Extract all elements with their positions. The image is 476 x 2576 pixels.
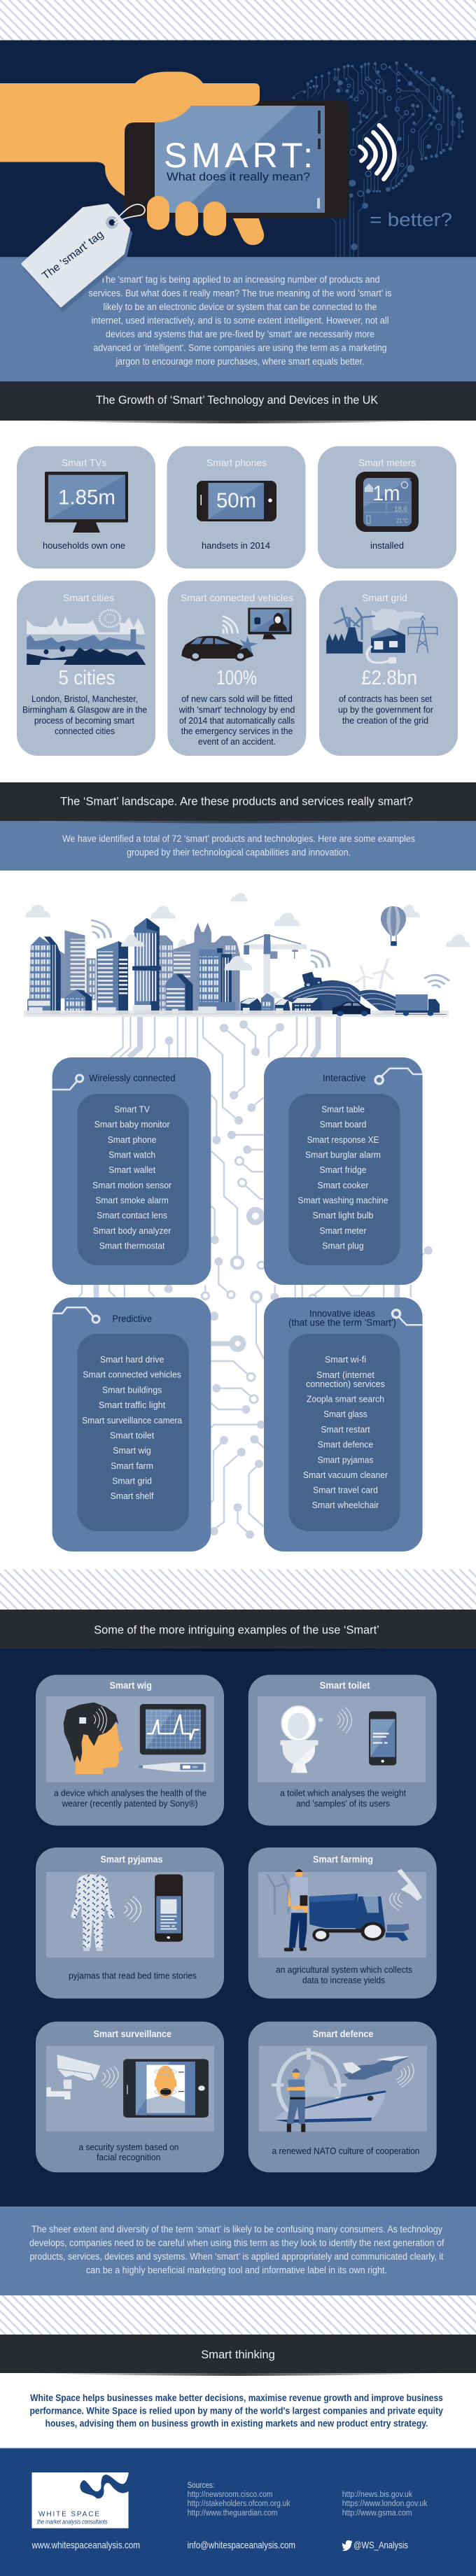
card: smart cities: 5 cities <box>59 667 115 689</box>
card: smart grid <box>319 581 458 756</box>
text: grid detail <box>338 694 434 726</box>
list: predictive: Smart hard drive <box>100 1354 164 1365</box>
intro band <box>0 257 476 381</box>
description <box>54 1789 206 1808</box>
card: smart phones <box>167 446 305 568</box>
footer <box>0 2448 476 2576</box>
description: a toilet which analyses the weight <box>280 1789 407 1799</box>
list: innovative ideas: Zoopla smart search <box>307 1394 384 1404</box>
panel: predictive <box>52 1297 211 1551</box>
text: cities detail <box>22 694 147 736</box>
logo: the market analysis consultants <box>37 2518 108 2525</box>
intro text: devices and systems that are pre-fixed by 'smart' are necessarily more <box>106 329 374 339</box>
balloon <box>381 906 406 946</box>
wifi signal icon <box>360 125 394 179</box>
circuit brain <box>292 62 464 257</box>
truck <box>395 994 447 1016</box>
icon: skyline <box>27 610 146 665</box>
list: interactive <box>288 1094 400 1265</box>
fingers <box>147 196 226 236</box>
card: smart TVs: households own one <box>43 540 125 551</box>
list: predictive: Smart connected vehicles <box>83 1369 181 1380</box>
city illustration <box>24 893 470 1017</box>
phone screen <box>155 106 325 213</box>
small house block <box>64 990 92 1014</box>
sources: Sources: <box>188 2482 215 2490</box>
email: info@whitespaceanalysis.com <box>188 2539 295 2550</box>
panel: predictive: Predictive <box>112 1313 152 1324</box>
icon: meter: 1m <box>372 481 400 505</box>
description: pyjamas that read bed time stories <box>69 1971 197 1980</box>
examples navy panel <box>0 1649 476 2207</box>
text: cities detail: London, Bristol, Manchester, <box>31 694 138 704</box>
card: smart wig <box>36 1675 224 1826</box>
list: wirelessly connected: Smart wallet <box>108 1164 155 1175</box>
icon: meter <box>356 472 419 532</box>
front low building <box>165 974 192 1014</box>
panel: wirelessly connected: Wirelessly connected <box>89 1072 176 1083</box>
card: smart grid: Smart grid <box>362 592 407 603</box>
panel: innovative ideas: Innovative ideas <box>309 1307 375 1318</box>
icon: phone: 50m <box>216 489 256 512</box>
text: vehicles detail: with 'smart' technology by end <box>178 704 295 715</box>
circuit accent <box>52 1307 99 1323</box>
card: smart phones: handsets in 2014 <box>202 540 270 551</box>
text: vehicles detail: the emergency services in the <box>181 726 293 736</box>
card: smart connected vehicles: Smart connected vehicles <box>181 592 293 603</box>
ground <box>24 1011 449 1017</box>
card: smart defence: Smart defence <box>313 2028 374 2039</box>
landscape intro band: grouped by their technological capabilities and innovation. <box>127 847 351 858</box>
list: wirelessly connected: Smart TV <box>114 1104 150 1114</box>
sources: https://www.london.gov.uk <box>342 2500 428 2508</box>
conclusion band: can be a highly beneficial marketing tool and informative label in its own right. <box>86 2265 387 2276</box>
car <box>332 1002 370 1016</box>
top stripes <box>0 0 476 41</box>
right building <box>198 948 235 1014</box>
icon: meter: 18.6 <box>394 505 407 514</box>
description: a device which analyses the health of the <box>54 1789 206 1799</box>
icon: TV: 1.85m <box>58 486 115 509</box>
intro text: services. But what does it really mean? The true meaning of the word 'smart' is <box>88 288 392 298</box>
list: innovative ideas: Smart wi-fi <box>325 1354 366 1365</box>
text: vehicles detail: of 2014 that automatically calls <box>179 715 295 726</box>
circuit accent <box>52 1075 83 1090</box>
list: innovative ideas: Smart wheelchair <box>312 1500 379 1510</box>
icon: meter: 21°C <box>396 517 408 524</box>
central tower <box>132 918 161 1014</box>
description: an agricultural system which collects <box>276 1965 412 1975</box>
icon: toilet and phone <box>280 1706 396 1773</box>
card: smart surveillance: Smart surveillance <box>94 2028 172 2039</box>
card: smart cities <box>17 581 155 756</box>
rear buildings <box>57 922 240 1013</box>
conclusion band <box>0 2207 476 2295</box>
text: grid detail: of contracts has been set <box>339 694 432 704</box>
circuit nodes <box>164 1020 433 1539</box>
list: predictive: Smart traffic light <box>99 1400 166 1410</box>
text: cities detail: process of becoming smart <box>34 715 134 726</box>
title: SMART: <box>164 136 313 175</box>
list: interactive: Smart plug <box>322 1240 364 1251</box>
card: smart toilet: Smart toilet <box>320 1680 370 1691</box>
list: interactive: Smart washing machine <box>298 1195 388 1205</box>
section heading: landscape: The ‘Smart’ landscape. Are these products and services really smart? <box>60 795 413 808</box>
card: smart defence <box>248 2022 437 2172</box>
icon: energy grid <box>326 607 438 663</box>
tractor <box>302 972 323 988</box>
list: interactive: Smart response XE <box>307 1134 379 1145</box>
description <box>280 1789 407 1808</box>
text: grid detail: the creation of the grid <box>342 715 428 726</box>
card: smart wig: Smart wig <box>109 1680 152 1691</box>
description: a renewed NATO culture of cooperation <box>272 2146 420 2156</box>
description: wearer (recently patented by Sony®) <box>62 1799 198 1808</box>
card: smart grid: £2.8bn <box>361 667 417 689</box>
twitter handle: @WS_Analysis <box>354 2539 408 2550</box>
company statement: houses, advising them on business growth in existing markets and new product entry strategy. <box>46 2418 428 2429</box>
hand <box>0 71 260 196</box>
icon: farmer, harvester and satellite <box>267 1869 422 1951</box>
logo <box>32 2472 129 2528</box>
card: smart TVs: Smart TVs <box>62 457 106 468</box>
hero panel <box>0 41 476 258</box>
section heading: examples: Some of the more intriguing examples of the use ‘Smart’ <box>94 1624 379 1636</box>
list: predictive: Smart farm <box>111 1461 153 1471</box>
list: wirelessly connected: Smart contact lens <box>97 1210 167 1220</box>
list: wirelessly connected <box>78 1094 189 1265</box>
icon: camera and tablet <box>46 2055 209 2118</box>
houses <box>240 992 323 1014</box>
sources: http://www.theguardian.com <box>188 2509 277 2517</box>
circuit rings <box>202 1157 316 1403</box>
list: wirelessly connected: Smart motion sensor <box>92 1180 172 1190</box>
list: interactive: Smart light bulb <box>312 1210 374 1220</box>
description <box>79 2143 178 2162</box>
tower left <box>27 936 61 1014</box>
circuit accent <box>392 1310 422 1325</box>
sources: http://news.bis.gov.uk <box>342 2491 412 2499</box>
list: innovative ideas <box>288 1334 400 1531</box>
cloud over towers <box>121 934 252 971</box>
card: smart cities: Smart cities <box>63 592 114 603</box>
card: smart toilet <box>248 1675 437 1826</box>
list: predictive: Smart grid <box>112 1475 152 1486</box>
icon: car and emergency call <box>181 608 291 661</box>
section heading: landscape <box>0 782 476 821</box>
list: predictive: Smart shelf <box>111 1491 154 1501</box>
conclusion band: develops, companies need to be careful when using this term as they look to identify the next generation of <box>29 2238 444 2248</box>
text: vehicles detail: event of an accident. <box>198 736 276 747</box>
card: smart farming: Smart farming <box>313 1853 373 1864</box>
intro text: advanced or 'intelligent'. Some companies are using the term as a marketing <box>94 343 386 353</box>
icon: soldier, ship and jet <box>272 2048 414 2132</box>
list: interactive: Smart meter <box>319 1225 367 1236</box>
card: smart meters: installed <box>370 540 404 551</box>
list: interactive: Smart fridge <box>319 1164 367 1175</box>
section heading: growth: The Growth of ‘Smart’ Technology and Devices in the UK <box>96 394 378 407</box>
list: innovative ideas: Smart (internet <box>316 1370 374 1380</box>
list: wirelessly connected: Smart phone <box>108 1134 157 1145</box>
intro text: internet, used interactively, and is to some extent intelligent. However, not all <box>91 315 389 326</box>
card: smart meters <box>318 446 456 568</box>
description <box>276 1965 412 1985</box>
card: smart TVs <box>17 446 155 568</box>
section heading: smart thinking: Smart thinking <box>201 2349 275 2361</box>
tag label: The 'smart' tag <box>40 228 106 282</box>
tower middle <box>97 941 128 1014</box>
subtitle: What does it really mean? <box>167 170 310 183</box>
conclusion band: The sheer extent and diversity of the term ‘smart’ is likely to be confusing many consumers. As technology <box>31 2224 442 2234</box>
panel: interactive <box>264 1057 423 1285</box>
twitter handle <box>342 2539 408 2551</box>
crane <box>244 934 307 1013</box>
list: wirelessly connected: Smart watch <box>108 1149 155 1160</box>
company statement <box>29 2392 443 2429</box>
circuit accent <box>375 1069 422 1084</box>
smart tag <box>22 204 145 310</box>
list: innovative ideas: Smart glass <box>323 1409 368 1419</box>
list: wirelessly connected: Smart body analyzer <box>93 1225 172 1236</box>
icon: TV <box>45 472 128 533</box>
panel: wirelessly connected <box>52 1057 211 1285</box>
stripes <box>0 2295 476 2335</box>
wind turbines <box>355 959 393 989</box>
icon: pyjamas and phone <box>71 1874 183 1951</box>
description: facial recognition <box>97 2153 160 2162</box>
list: predictive <box>78 1334 189 1531</box>
card: smart connected vehicles: 100% <box>216 667 257 689</box>
list: innovative ideas: connection) services <box>306 1379 385 1389</box>
text: vehicles detail: of new cars sold will be fitted <box>181 694 293 704</box>
list: wirelessly connected: Smart smoke alarm <box>95 1195 169 1205</box>
hills <box>282 980 396 1014</box>
list: predictive: Smart wig <box>113 1445 151 1456</box>
landscape intro band: We have identified a total of 72 ‘smart’ products and technologies. Here are some examples <box>62 833 415 844</box>
intro text <box>88 274 392 367</box>
card: smart meters: Smart meters <box>358 457 416 468</box>
section heading: smart thinking <box>0 2335 476 2376</box>
list: innovative ideas: Smart travel card <box>313 1485 378 1495</box>
list: interactive: Smart table <box>321 1104 365 1114</box>
intro text: jargon to encourage more purchases, where smart equals better. <box>115 356 365 367</box>
text: vehicles detail <box>178 694 295 747</box>
list: innovative ideas: Smart restart <box>321 1424 370 1435</box>
list: wirelessly connected: Smart baby monitor <box>94 1119 170 1129</box>
text: cities detail: connected cities <box>55 726 115 736</box>
sources <box>188 2482 428 2517</box>
lower finger <box>232 217 264 245</box>
list: innovative ideas: Smart pyjamas <box>318 1454 374 1465</box>
list: predictive: Smart surveillance camera <box>82 1415 183 1426</box>
stripes <box>0 1570 476 1610</box>
website: www.whitespaceanalysis.com <box>31 2539 140 2550</box>
list: interactive: Smart cooker <box>318 1180 369 1190</box>
list: predictive: Smart toilet <box>110 1430 155 1440</box>
card: smart surveillance <box>36 2022 224 2172</box>
panel: innovative ideas: (that use the term 'Smart') <box>288 1317 396 1328</box>
card: smart farming <box>248 1847 437 1999</box>
sources: http://www.gsma.com <box>342 2509 412 2517</box>
panel: innovative ideas <box>264 1297 423 1551</box>
description: data to increase yields <box>302 1976 385 1985</box>
phone <box>125 101 348 218</box>
list: interactive: Smart burglar alarm <box>305 1149 381 1160</box>
wifi arcs <box>91 920 449 988</box>
sources: http://newsroom.cisco.com <box>188 2491 272 2499</box>
card: smart pyjamas <box>36 1847 224 1999</box>
sources: http://stakeholders.ofcom.org.uk <box>188 2500 290 2508</box>
list: interactive: Smart board <box>320 1119 366 1129</box>
section heading: growth <box>0 381 476 423</box>
icon: head and monitor <box>64 1703 206 1774</box>
description: and 'samples' of its users <box>296 1799 390 1808</box>
intro text: The 'smart' tag is being applied to an increasing number of products and <box>101 274 379 285</box>
clouds <box>25 893 470 947</box>
card: smart pyjamas: Smart pyjamas <box>101 1853 163 1864</box>
logo: WHITE SPACE <box>38 2511 99 2518</box>
text: cities detail: Birmingham & Glasgow are in the <box>22 704 147 715</box>
text: grid detail: up by the government for <box>338 704 434 715</box>
description: a security system based on <box>79 2143 178 2153</box>
card: smart phones: Smart phones <box>206 457 267 468</box>
panel: interactive: Interactive <box>323 1072 366 1083</box>
section heading: examples <box>0 1610 476 1649</box>
better text: = better? <box>370 209 452 230</box>
list: predictive: Smart buildings <box>102 1384 162 1395</box>
list: wirelessly connected: Smart thermostat <box>99 1240 165 1251</box>
conclusion band: products, services, devices and systems. When ‘smart’ is applied appropriately and communicated clearly, it <box>29 2251 444 2262</box>
list: innovative ideas: Smart defence <box>318 1439 373 1450</box>
intro text: likely to be an electronic device or system that can be connected to the <box>104 302 377 312</box>
icon: phone <box>197 481 276 521</box>
list: innovative ideas: Smart vacuum cleaner <box>303 1470 388 1480</box>
circuit lines <box>78 1017 433 1539</box>
card: smart connected vehicles <box>167 581 306 756</box>
landscape intro band <box>0 821 476 871</box>
